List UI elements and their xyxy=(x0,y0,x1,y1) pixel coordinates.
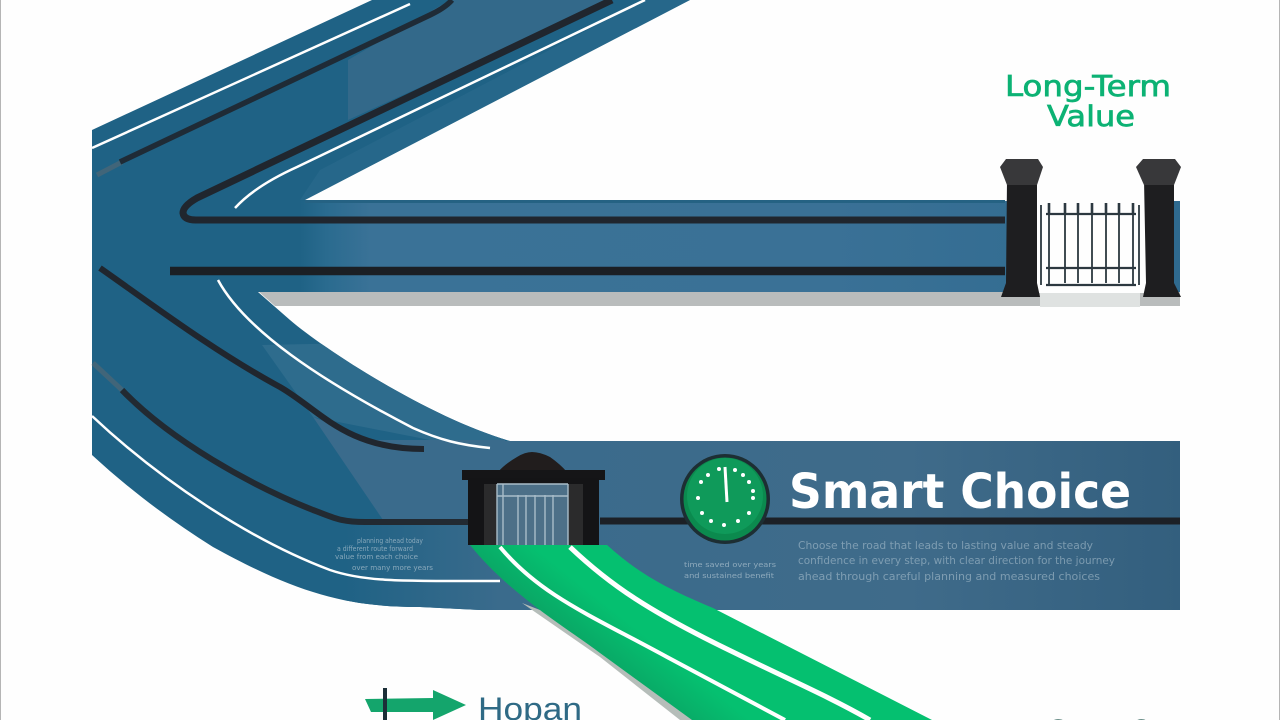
lower left panel shading xyxy=(345,522,501,610)
icon: long-term value gate xyxy=(1000,159,1181,307)
left pillar cap xyxy=(1000,159,1043,185)
green road white line left xyxy=(500,547,785,720)
top dark lane line faded start xyxy=(97,162,122,175)
lower dark lane faded start xyxy=(93,363,122,390)
text block: road caption: over many more years xyxy=(352,564,433,572)
outer lane shading xyxy=(300,0,690,200)
road shading above middle line xyxy=(262,340,505,440)
text block: road caption: value from each choice xyxy=(335,553,418,561)
gatehouse opening xyxy=(497,484,568,545)
green road white line right xyxy=(570,547,870,720)
main blue road xyxy=(92,0,1180,610)
middle white lane line xyxy=(218,280,490,448)
heading: smart choice: Smart Choice xyxy=(789,464,1131,520)
text block: smart choice description xyxy=(798,540,1115,583)
text block: clock caption: time saved over years xyxy=(684,561,776,569)
text block: clock caption: and sustained benefit xyxy=(684,572,774,580)
green road surface xyxy=(470,545,932,720)
upper road band xyxy=(300,201,1180,292)
heading: long-term value xyxy=(1005,70,1171,133)
text block: smart choice description: Choose the road that leads to lasting value and steady xyxy=(798,540,1093,552)
clock face xyxy=(684,458,766,540)
text block: smart choice description: ahead through careful planning and measured choices xyxy=(798,571,1100,583)
lower road panel xyxy=(500,441,1180,610)
top dark lane line xyxy=(120,0,452,162)
upper curved white line xyxy=(235,0,645,208)
heading: long-term value: Value xyxy=(1047,100,1135,133)
gate opening background xyxy=(1036,199,1146,293)
upper band top edge xyxy=(305,200,1005,203)
right pillar cap xyxy=(1136,159,1181,185)
icon: right pillar xyxy=(1136,159,1181,297)
arrow body xyxy=(365,690,466,720)
clock ticks xyxy=(696,467,755,527)
green road xyxy=(470,545,932,720)
lower horizontal dark line xyxy=(170,267,1005,275)
icon: iron fence gate xyxy=(1041,203,1139,285)
gatehouse inner shade xyxy=(484,484,583,545)
clock hand xyxy=(725,467,727,502)
lower white lane line xyxy=(92,416,500,581)
lower band dark line xyxy=(600,518,1180,524)
gatehouse bars xyxy=(497,484,568,545)
text block: road caption xyxy=(335,537,433,572)
lighter road facet lower xyxy=(313,417,505,520)
gatehouse body xyxy=(468,478,599,545)
icon: green clock xyxy=(680,454,770,544)
green road shadow xyxy=(522,603,696,720)
gatehouse roof ledge xyxy=(462,470,605,480)
gate ground xyxy=(1040,293,1140,307)
clock rim xyxy=(680,454,770,544)
icon: left pillar xyxy=(1000,159,1043,297)
left pillar body xyxy=(1001,180,1040,297)
signpost pole xyxy=(383,688,387,720)
right pillar body xyxy=(1143,180,1181,297)
road network xyxy=(92,0,1180,610)
gatehouse roof dome xyxy=(498,452,567,472)
text block: clock caption xyxy=(684,561,776,580)
text block: road caption: planning ahead today xyxy=(357,537,423,545)
icon: signpost arrow xyxy=(365,688,466,720)
text block: road caption: a different route forward xyxy=(337,545,413,553)
middle dark lane line xyxy=(100,268,424,449)
lighter road facet upper xyxy=(348,0,612,120)
road shadow strip xyxy=(258,291,1180,306)
icon: lower gatehouse xyxy=(462,452,605,545)
text block: smart choice description: confidence in every step, with clear direction for the journey xyxy=(798,555,1115,567)
clock inner face xyxy=(687,458,763,534)
top white lane line xyxy=(92,4,410,148)
heading: long-term value: Long-Term xyxy=(1005,70,1171,103)
lower dark lane line xyxy=(122,390,470,522)
upper curved dark line xyxy=(183,0,1005,220)
